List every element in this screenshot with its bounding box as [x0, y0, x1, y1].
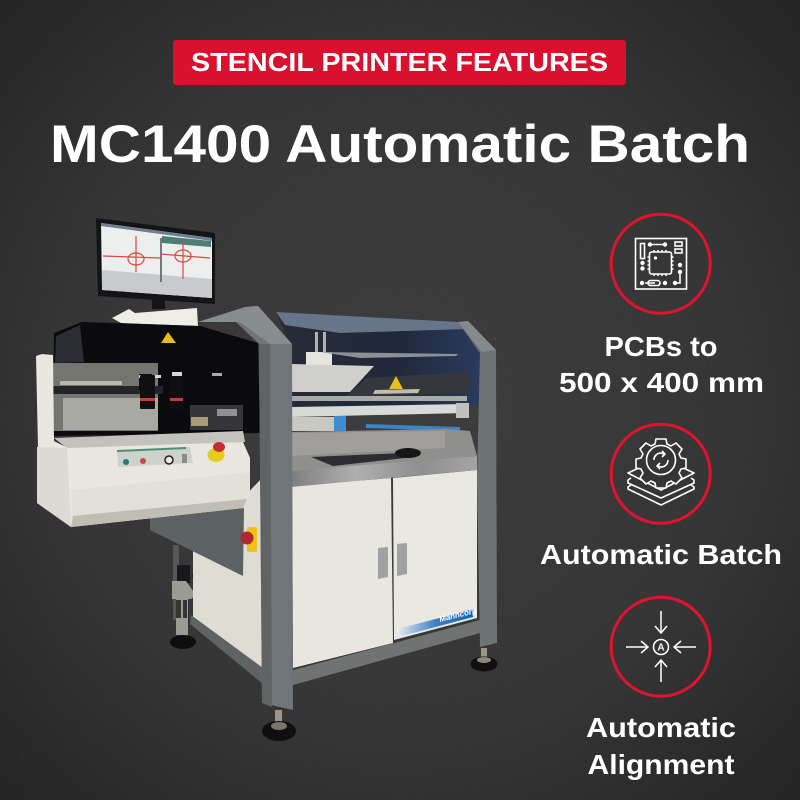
right foot — [470, 648, 498, 672]
feature: automatic alignment — [586, 597, 736, 780]
rear left foot and air filter — [170, 545, 199, 649]
warning triangle — [161, 332, 176, 343]
brand stripe: Manncorp — [438, 606, 478, 624]
hood reflection — [55, 325, 84, 363]
label: Automatic Alignment: Automatic — [586, 712, 736, 743]
base rail front — [293, 620, 480, 685]
keyboard — [311, 453, 405, 466]
deck front edge — [291, 456, 477, 487]
right pillar — [458, 321, 497, 647]
label: Automatic Alignment — [586, 712, 736, 780]
feature: automatic batch — [540, 424, 782, 570]
front foot — [262, 710, 296, 741]
label: Automatic Alignment: Alignment — [588, 749, 734, 780]
machine side panel — [193, 478, 263, 670]
icon: gear over stacked layers — [611, 424, 710, 523]
vision unit cover — [112, 308, 198, 326]
upper work area glass — [276, 312, 480, 410]
icon: alignment arrows: A — [657, 642, 665, 654]
stainless deck — [291, 429, 477, 472]
label: PCBs to 500 x 400 mm — [559, 331, 764, 398]
dark underside plate — [150, 508, 244, 576]
deck back panel — [291, 431, 445, 456]
black hood — [53, 322, 260, 436]
door handles — [378, 543, 407, 579]
brand stripe — [397, 606, 478, 637]
icon: circuit board — [611, 214, 710, 313]
control panel — [117, 447, 193, 467]
feature: PCB size — [559, 214, 764, 398]
left pillar — [198, 306, 293, 710]
monitor — [96, 218, 215, 309]
badge: stencil printer features — [173, 40, 626, 85]
glass top reflection — [276, 312, 466, 333]
label: Automatic Batch: Automatic Batch — [540, 539, 782, 570]
print head mechanism — [292, 332, 470, 431]
badge: stencil printer features: STENCIL PRINTER FEATURES — [191, 47, 608, 77]
title: MC1400 Automatic Batch — [50, 115, 750, 174]
white front enclosure — [37, 441, 250, 527]
icon: alignment arrows — [611, 597, 710, 696]
cabinet doors — [292, 470, 477, 668]
left white column — [36, 354, 54, 448]
label: PCBs to 500 x 400 mm: 500 x 400 mm — [559, 367, 764, 398]
power switch — [240, 527, 257, 552]
interior — [53, 363, 243, 431]
mouse — [395, 448, 421, 458]
base rail side — [190, 615, 263, 684]
label: PCBs to 500 x 400 mm: PCBs to — [604, 331, 718, 362]
machine illustration — [36, 218, 498, 741]
emergency stop — [208, 442, 225, 462]
conveyor lip — [54, 431, 245, 449]
